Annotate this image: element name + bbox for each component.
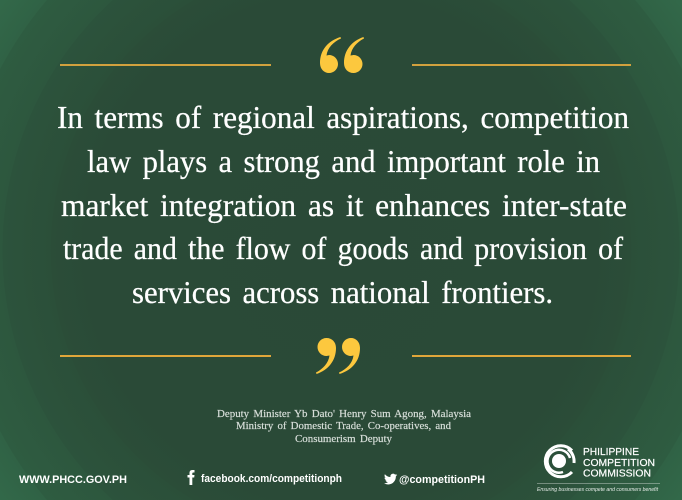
bottom divider lines [60, 355, 631, 357]
attribution: Consumerism Deputy [295, 433, 392, 445]
twitter handle: @competitionPH [399, 474, 485, 486]
quote text: In terms of regional aspirations, competition [57, 99, 629, 135]
top divider lines [60, 64, 631, 66]
logo wordmark [583, 446, 655, 480]
icon: twitter [384, 474, 397, 484]
icon: facebook [188, 470, 194, 485]
website: WWW.PHCC.GOV.PH [19, 474, 127, 486]
logo tagline: Ensuring businesses compete and consumers benefit [537, 487, 659, 493]
logo wordmark: COMMISSION [583, 468, 651, 480]
attribution: Deputy Minister Yb Dato' Henry Sum Agong, Malaysia [217, 408, 471, 420]
quote text: market integration as it enhances inter-state [61, 187, 627, 223]
quote text: trade and the flow of goods and provision of [63, 230, 623, 266]
quote text: services across national frontiers. [132, 274, 553, 310]
logo wordmark: PHILIPPINE [583, 446, 639, 458]
attribution [217, 408, 471, 445]
logo wordmark: COMPETITION [583, 457, 655, 469]
attribution: Ministry of Domestic Trade, Co-operatives, and [236, 420, 451, 432]
logo rule [537, 483, 660, 484]
icon: opening quote mark [320, 37, 364, 73]
icon: closing quote mark [316, 338, 360, 374]
quote text: law plays a strong and important role in [87, 143, 600, 179]
logo mark [545, 446, 574, 477]
quote text [57, 99, 629, 310]
facebook handle: facebook.com/competitionph [201, 473, 342, 485]
logo: Philippine Competition Commission [537, 446, 660, 493]
